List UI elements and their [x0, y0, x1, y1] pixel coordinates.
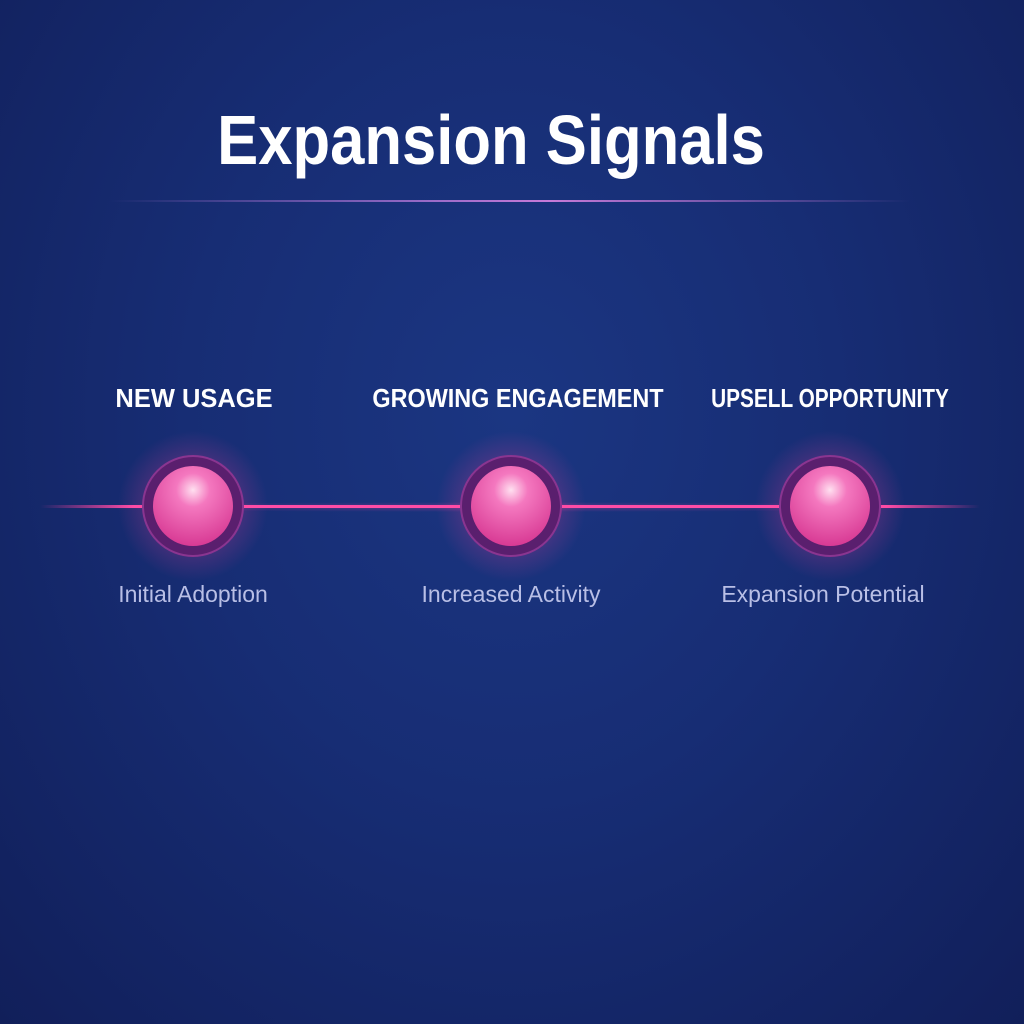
subtitle 3: Expansion Potential: [721, 581, 925, 607]
subtitle 1: Initial Adoption: [118, 581, 268, 607]
heading 1: NEW USAGE: [115, 383, 273, 413]
heading 2: GROWING ENGAGEMENT: [372, 383, 664, 413]
node 2: [436, 431, 586, 581]
subtitle 2: Increased Activity: [422, 581, 600, 607]
heading 3: UPSELL OPPORTUNITY: [711, 383, 949, 413]
node 3: [755, 431, 905, 581]
title: Expansion Signals: [217, 101, 765, 179]
node 1: [118, 431, 268, 581]
